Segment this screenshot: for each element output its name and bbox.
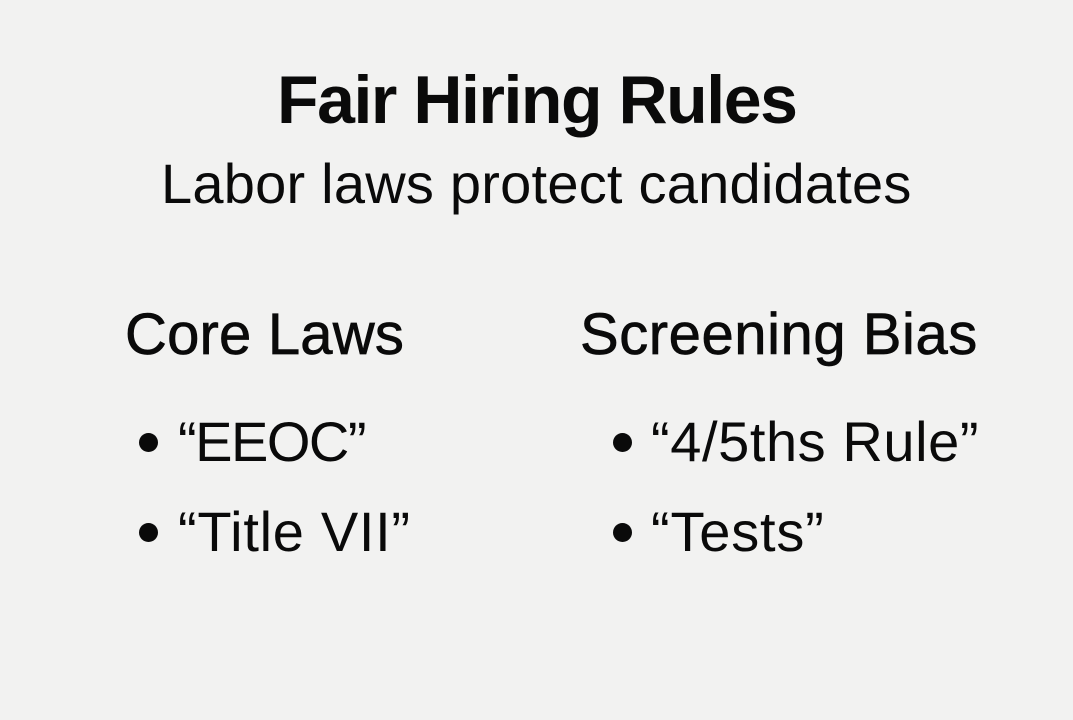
bullet item: Title VII: “Title VII” <box>178 500 411 563</box>
heading: screening bias: Screening Bias <box>580 302 978 367</box>
panel: screening bias <box>580 302 979 563</box>
bullet item: tests: “Tests” <box>651 500 825 563</box>
panel: core laws <box>125 302 411 563</box>
subtitle: Labor laws protect candidates <box>161 152 912 215</box>
heading: core laws: Core Laws <box>125 302 404 367</box>
bullet item: 4/5ths rule: “4/5ths Rule” <box>651 410 979 473</box>
title: Fair Hiring Rules <box>277 62 796 138</box>
bullet item: EEOC: “EEOC” <box>178 410 365 473</box>
